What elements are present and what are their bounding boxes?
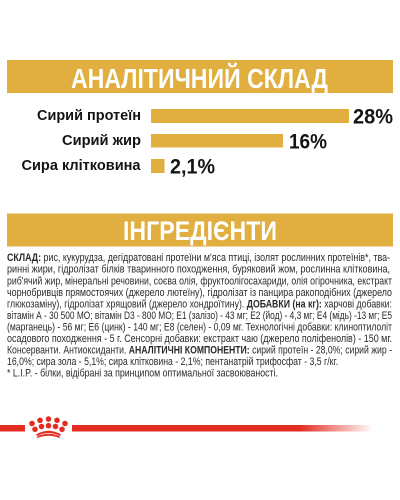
panel: analytical composition bbox=[7, 60, 393, 178]
icon: crown bbox=[29, 416, 68, 438]
ingredients text block bbox=[7, 252, 392, 380]
heading banner: ingredients bbox=[7, 214, 393, 246]
bar row: crude fibre: 2,1% bbox=[170, 154, 215, 178]
bar row: crude fat bbox=[62, 130, 327, 154]
bar row: crude protein: Сирий протеїн bbox=[37, 108, 141, 124]
ingredients text block: * L.I.P. - білки, відібрані за принципом оптимальної засвоюваності. bbox=[7, 368, 278, 380]
heading banner: ingredients: ІНГРЕДІЄНТИ bbox=[123, 216, 277, 246]
bar row: crude fat: 16% bbox=[289, 130, 327, 154]
bar row: crude fibre: Сира клітковина bbox=[22, 158, 141, 174]
footer: red brand line with crown bbox=[0, 416, 373, 438]
heading banner: analytical composition: АНАЛІТИЧНИЙ СКЛАД bbox=[71, 62, 328, 94]
bar row: crude fibre bbox=[22, 154, 215, 178]
bar row: crude protein: 28% bbox=[353, 104, 393, 128]
panel: ingredients bbox=[7, 214, 393, 380]
bar row: crude fat: Сирий жир bbox=[62, 133, 141, 149]
bar row: crude protein bbox=[37, 104, 393, 128]
ingredients text block: глюкозаміну), гідролізат хрящовий (джерело хондроїтину). ДОБАВКИ (на кг): харчові добавки: bbox=[7, 298, 392, 310]
